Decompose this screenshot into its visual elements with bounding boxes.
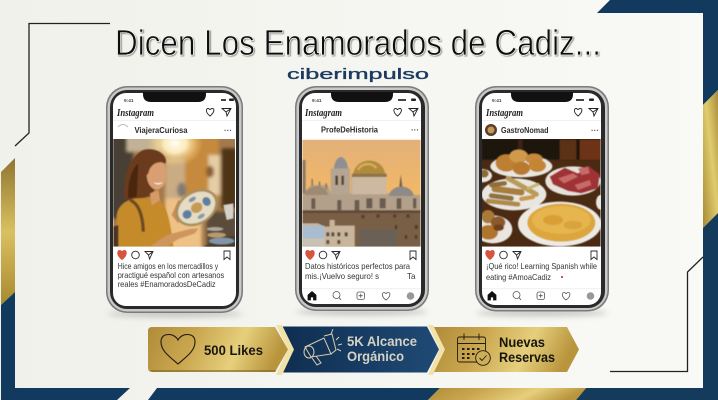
status bar <box>312 98 416 104</box>
foreground houses <box>302 220 355 247</box>
caption: mis.¡Vuelvo seguro! s <box>305 271 379 281</box>
status bar: 9:41 <box>312 98 322 104</box>
icon: megaphone <box>304 329 342 365</box>
ribbon: 500 Likes <box>148 327 288 372</box>
username: ProfeDeHistoria <box>321 126 379 134</box>
plate small right <box>595 194 600 210</box>
plate: tortilla <box>518 202 601 246</box>
status bar <box>124 98 234 104</box>
avatar <box>485 124 497 136</box>
photo: woman with ceramic plate <box>113 139 235 247</box>
label: 500 Likes <box>204 342 263 358</box>
ribbon: 5K Alcance Organico <box>276 325 439 375</box>
action icons <box>486 250 597 260</box>
corner line: top left <box>15 24 110 146</box>
label: Orgánico <box>347 349 404 364</box>
plate right: ham <box>545 166 601 196</box>
photo: Cadiz cathedral at sunset <box>302 140 421 247</box>
left side chapel <box>305 186 328 195</box>
caption: ¡Qué rico! Learning Spanish while <box>486 261 597 271</box>
caption: Datos históricos perfectos para <box>305 261 410 271</box>
caption <box>486 261 597 282</box>
lower brown wall <box>302 210 421 247</box>
chevron edge <box>276 325 294 375</box>
wordmark: Instagram <box>304 107 342 119</box>
brand: ciberimpulso: ciberimpulso <box>287 66 429 83</box>
icons: heart and send <box>394 108 418 116</box>
bell tower <box>330 168 350 194</box>
more dots: ··· <box>224 126 232 135</box>
icons: heart and send <box>574 108 598 116</box>
ribbon: Nuevas Reservas <box>428 325 579 375</box>
caption <box>305 261 416 281</box>
caption: Ta <box>407 271 416 281</box>
notch <box>331 92 393 102</box>
notch <box>143 92 206 102</box>
tab bar <box>308 292 414 300</box>
ceramic plate <box>175 188 218 227</box>
shadow <box>296 308 428 316</box>
title: Dicen Los Enamorados de Cadiz... <box>115 22 601 63</box>
label <box>499 335 555 365</box>
icon: calendar <box>458 334 490 365</box>
icons: heart and send <box>206 108 231 116</box>
label: Nuevas <box>499 335 545 350</box>
arm <box>150 228 198 247</box>
tab bar <box>488 292 594 300</box>
cathedral facade <box>302 175 421 212</box>
plate bottom left: tapas <box>482 214 514 244</box>
device body <box>106 86 243 313</box>
hair <box>124 149 166 200</box>
username: GastroNomad <box>501 126 549 135</box>
face <box>147 159 167 190</box>
status bar: 9:41 <box>492 98 502 104</box>
wordmark: Instagram <box>116 107 154 119</box>
shadow <box>107 310 243 318</box>
torso <box>117 197 173 247</box>
action icons <box>306 250 416 260</box>
icon: heart <box>161 334 195 364</box>
main dome <box>353 161 385 176</box>
notch <box>511 92 573 102</box>
caption: Hice amigos en los mercadillos y <box>118 261 219 271</box>
caption: eating #AmoaCadiz <box>486 272 551 282</box>
plate left: fried fish <box>482 178 546 210</box>
caption <box>118 261 224 289</box>
more dots: ··· <box>411 126 419 134</box>
label <box>347 334 417 364</box>
more dots: ··· <box>591 126 599 135</box>
status bar: 9:41 <box>124 98 134 104</box>
username: ViajeraCuriosa <box>134 126 188 135</box>
wordmark: Instagram <box>485 107 523 119</box>
caption: reales #EnamoradosDeCadiz <box>118 279 216 289</box>
status bar <box>492 98 594 104</box>
phone 2 <box>295 86 429 316</box>
plate small top left <box>482 168 493 184</box>
photo: tapas plates <box>482 139 601 247</box>
phone 1 <box>106 86 243 318</box>
phone 3 <box>472 86 609 316</box>
action icons <box>118 250 230 260</box>
device body <box>475 86 609 312</box>
avatar <box>118 124 128 127</box>
plate top: pastries <box>490 155 552 177</box>
corner line: bottom right <box>610 257 703 372</box>
label: Reservas <box>499 350 555 365</box>
label: 5K Alcance <box>347 334 417 349</box>
caption: practigué español con artesanos <box>118 270 224 280</box>
small dome <box>389 186 414 196</box>
device body <box>295 86 429 311</box>
shadow <box>476 310 608 316</box>
